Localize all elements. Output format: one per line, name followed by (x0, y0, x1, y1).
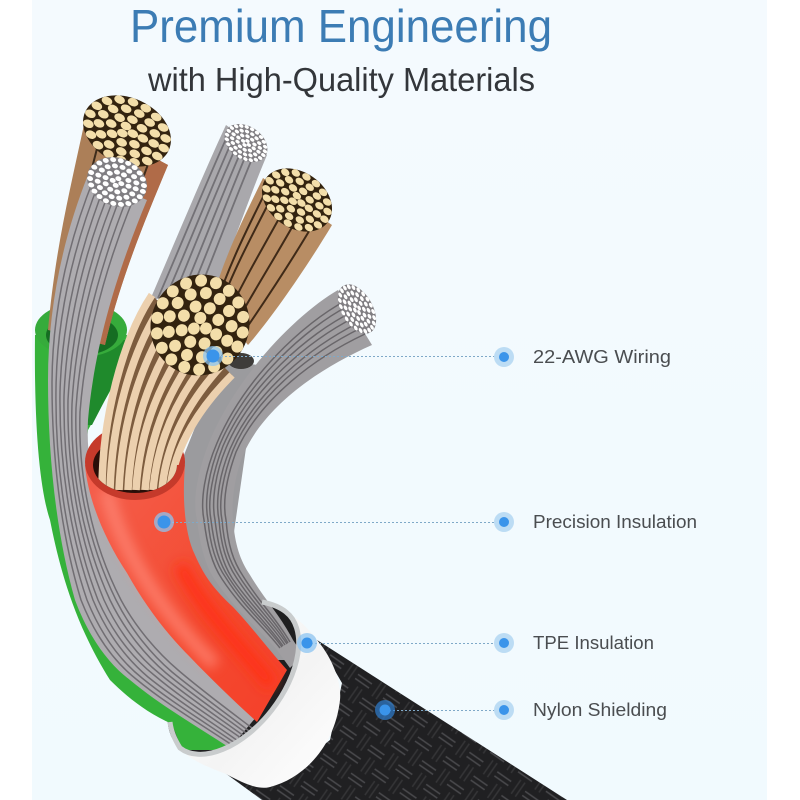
title: Premium Engineering (130, 0, 552, 52)
right copper wire (212, 178, 332, 345)
callout: 22-AWG Wiring: 22-AWG Wiring (533, 346, 671, 367)
callout: Nylon Shielding: Nylon Shielding (533, 699, 667, 720)
nylon braided shielding (225, 640, 567, 800)
back copper wire (48, 120, 168, 345)
red insulated wire (85, 424, 287, 722)
cable illustration (35, 82, 567, 800)
callout: TPE Insulation (297, 632, 654, 653)
right silver wire (195, 290, 372, 668)
left silver wire (48, 175, 262, 748)
back copper strand end (71, 82, 183, 180)
left silver strand end (80, 149, 154, 215)
right silver strand end (330, 278, 384, 340)
front copper strand end (132, 256, 268, 394)
callout: Nylon Shielding (375, 699, 667, 720)
middle silver wire (150, 125, 267, 300)
right copper strand end (250, 155, 344, 245)
green insulated wire (35, 303, 240, 750)
middle silver strand end (217, 116, 275, 170)
callout: Precision Insulation: Precision Insulation (533, 511, 697, 532)
collar opening (141, 582, 325, 778)
front copper wire (100, 295, 232, 490)
white collar (170, 602, 340, 788)
gray insulation (178, 353, 290, 660)
callout: 22-AWG Wiring (203, 346, 671, 367)
callout: Precision Insulation (154, 511, 697, 532)
subtitle: with High-Quality Materials (147, 61, 535, 98)
callout: TPE Insulation: TPE Insulation (533, 632, 654, 653)
